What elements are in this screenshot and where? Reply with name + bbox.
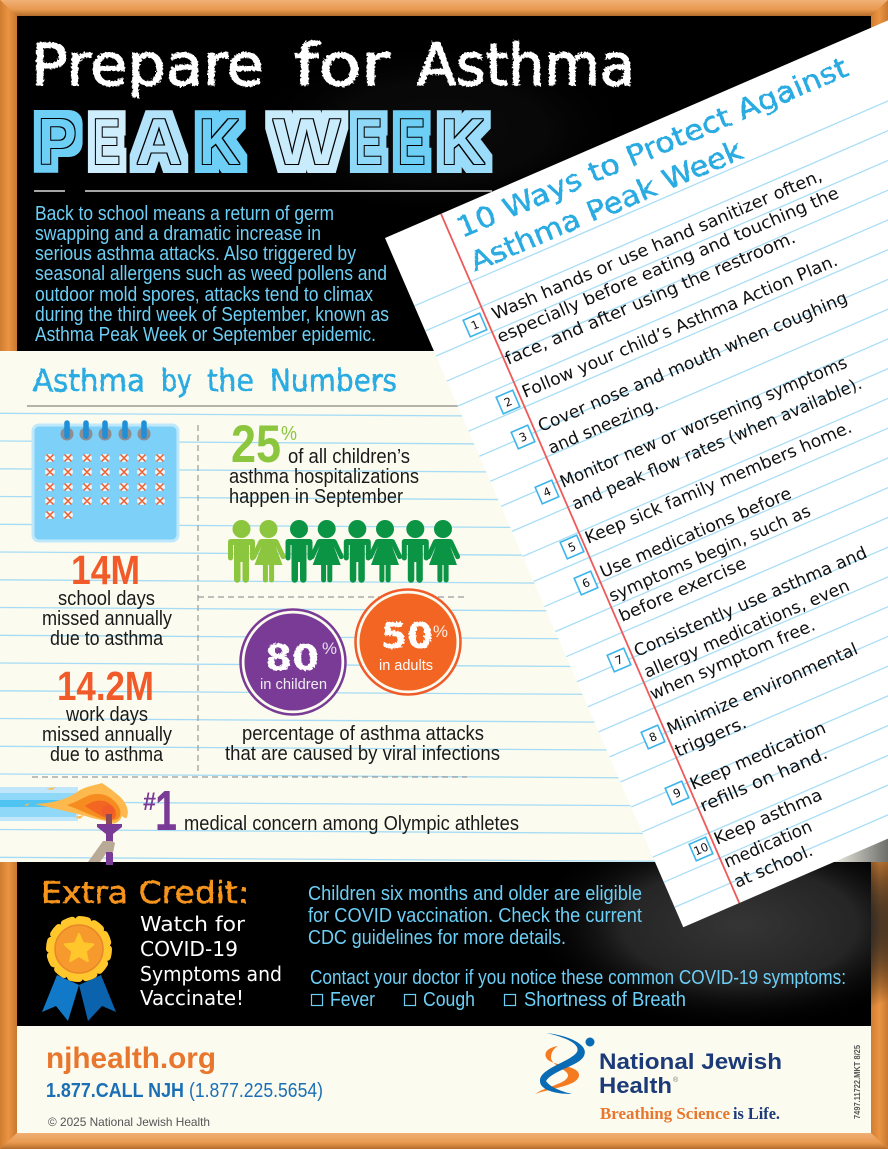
number boxes: 10 (692, 840, 710, 858)
badge: 80% in children (240, 610, 346, 714)
list of ten tips: Follow your child’s Asthma Action Plan. (519, 251, 841, 403)
logo: wordmark: Health (599, 1073, 672, 1098)
badge: 50% in adults: % (433, 622, 448, 641)
list of ten tips: at school. (731, 841, 816, 893)
title: Prepare for Asthma: Asthma (417, 31, 635, 99)
stat: 14.2M work days: work days (65, 704, 148, 726)
stat: 14.2M work days (42, 663, 172, 766)
text: watch for covid symptoms: Watch for (140, 912, 246, 936)
heading underline (27, 405, 458, 407)
heading: Extra Credit: Extra Credit: (41, 876, 249, 911)
text: watch for covid symptoms (140, 912, 282, 1010)
logo: wordmark: Breathing Science (600, 1104, 730, 1123)
stat: 25% hospitalizations: % (281, 423, 297, 445)
panel heading: by (161, 364, 192, 399)
stat: 25% hospitalizations: happen in September (229, 486, 403, 508)
intro paragraph: swapping and a dramatic increase in (35, 223, 321, 245)
number boxes: 1 (469, 317, 481, 333)
title: PEAK WEEK: P (38, 105, 77, 178)
logo: wordmark: is Life. (733, 1104, 780, 1123)
list of ten tips: before exercise (616, 554, 750, 627)
stat: #1 medical concern: # (143, 788, 156, 816)
logo: wordmark (599, 1049, 782, 1123)
title: PEAK WEEK: W (273, 105, 341, 178)
intro paragraph: Asthma Peak Week or September epidemic. (35, 324, 376, 346)
stat: 14.2M work days: due to asthma (50, 744, 164, 766)
paper heading (452, 51, 853, 278)
footer panel (17, 1026, 871, 1133)
number boxes: 5 (566, 539, 578, 555)
text: watch for covid symptoms: Vaccinate! (140, 986, 244, 1010)
stat: 14M school days: due to asthma (50, 628, 164, 650)
intro paragraph: seasonal allergens such as weed pollens and (35, 263, 387, 285)
phone number: 1.877.CALL NJH (46, 1080, 184, 1102)
text: watch for covid symptoms: Symptoms and (140, 962, 282, 986)
list of ten tips: Minimize environmental (664, 639, 861, 740)
text: covid symptoms checklist: Cough (423, 989, 475, 1011)
stat: 25% hospitalizations: asthma hospitalizations (229, 466, 419, 488)
print code: 7497.11722.MKT 8/25 (853, 1044, 862, 1119)
logo: wordmark: ® (673, 1076, 679, 1084)
list of ten tips: medication (721, 817, 815, 873)
stat: 25% hospitalizations: of all children’s (288, 446, 410, 468)
text: watch for covid symptoms: COVID-19 (140, 937, 238, 961)
list of ten tips: allergy medications, even (641, 576, 853, 683)
number boxes: 8 (647, 729, 659, 745)
icon: calendar (33, 423, 178, 541)
stat: #1 medical concern: 1 (155, 779, 177, 843)
list of ten tips (489, 166, 870, 893)
panel heading: Numbers (270, 364, 397, 399)
badge: 50% in adults (356, 590, 460, 694)
text: vaccination info (308, 883, 642, 949)
text: covid symptoms checklist: Shortness of Breath (524, 989, 686, 1011)
stat: #1 medical concern: medical concern among Olympic athletes (184, 813, 519, 835)
intro paragraph: during the third week of September, known as (35, 304, 389, 326)
panel heading: Asthma (33, 364, 145, 399)
list of ten tips: Monitor new or worsening symptoms (557, 353, 850, 493)
number boxes: 2 (502, 394, 514, 410)
stat: 14M school days: missed annually (42, 608, 172, 630)
title: PEAK WEEK: E (93, 105, 120, 178)
list of ten tips: Wash hands or use hand sanitizer often, (489, 166, 825, 325)
text: covid symptoms checklist: Fever (330, 989, 375, 1011)
number boxes: 4 (541, 484, 553, 500)
text: vaccination info: Children six months and older are eligible (308, 883, 642, 905)
number boxes (463, 313, 713, 861)
number boxes: 7 (613, 652, 625, 668)
panel heading: the (207, 364, 254, 399)
stat: 14.2M work days: 14.2M (57, 663, 154, 709)
title: Prepare for Asthma: for (294, 31, 390, 99)
title: PEAK WEEK: K (441, 105, 485, 178)
logo: wordmark: National Jewish (599, 1049, 782, 1074)
stat: #1 medical concern (143, 779, 519, 843)
caption: viral infections: that are caused by viral infections (225, 743, 500, 765)
list of ten tips: Consistently use asthma and (631, 543, 870, 662)
list of ten tips: triggers. (672, 713, 750, 762)
stat: 14M school days: school days (58, 588, 155, 610)
copyright: © 2025 National Jewish Health (48, 1115, 210, 1129)
phone number: (1.877.225.5654) (189, 1080, 323, 1102)
badge: 80% in children: 80 (265, 638, 319, 679)
badge: 80% in children: % (322, 639, 337, 658)
number boxes: 3 (517, 429, 529, 445)
badge: 50% in adults: 50 (381, 616, 433, 657)
stat: 25% hospitalizations: 25 (231, 415, 281, 474)
stat: 14M school days (42, 547, 172, 650)
stat: 14M school days: 14M (71, 547, 140, 593)
text: vaccination info: for COVID vaccination. Check the current (308, 905, 642, 927)
list of ten tips: Keep sick family members home. (582, 418, 855, 549)
logo: helix (535, 1033, 594, 1094)
website url: njhealth.org (46, 1042, 216, 1075)
list of ten tips: especially before eating and touching the (494, 183, 842, 348)
icon: row of children (228, 520, 460, 583)
badge: 50% in adults: in adults (379, 657, 433, 674)
title: PEAK WEEK: K (199, 105, 240, 178)
intro paragraph: serious asthma attacks. Also triggered by (35, 243, 356, 265)
title: PEAK WEEK: A (136, 105, 182, 178)
paper heading: 10 Ways to Protect Against (452, 51, 853, 244)
badge: 80% in children: in children (260, 676, 327, 693)
number boxes: 9 (671, 785, 683, 801)
panel: notebook paper (385, 0, 888, 927)
text: covid symptoms checklist (310, 967, 846, 1011)
list of ten tips: Keep asthma (711, 785, 825, 850)
intro paragraph: outdoor mold spores, attacks tend to climax (35, 284, 373, 306)
list of ten tips: symptoms begin, such as (606, 501, 814, 607)
caption: viral infections (225, 723, 500, 765)
icon: award ribbon (42, 920, 116, 1021)
phone number (46, 1080, 323, 1102)
stat: 14.2M work days: missed annually (42, 724, 172, 746)
chalk divider line (34, 190, 492, 192)
text: vaccination info: CDC guidelines for more details. (308, 927, 566, 949)
intro paragraph: Back to school means a return of germ (35, 203, 334, 225)
list of ten tips: face, and after using the restroom. (502, 228, 799, 370)
icon: olympic torch (0, 783, 128, 865)
list of ten tips: Cover nose and mouth when coughing (535, 288, 851, 437)
title: PEAK WEEK: E (355, 105, 382, 178)
number boxes: 6 (580, 575, 592, 591)
list of ten tips: when symptom free. (647, 616, 818, 705)
list of ten tips: and sneezing. (545, 394, 662, 459)
list of ten tips: Use medications before (597, 484, 795, 583)
title: PEAK WEEK: E (398, 105, 425, 178)
list of ten tips: Keep medication (687, 718, 829, 795)
list of ten tips: refills on hand. (697, 744, 831, 817)
title: Prepare for Asthma: Prepare (31, 31, 264, 99)
paper heading: Asthma Peak Week (465, 133, 748, 278)
caption: viral infections: percentage of asthma attacks (242, 723, 484, 745)
list of ten tips: and peak flow rates (when available). (569, 374, 865, 515)
intro paragraph (35, 203, 389, 346)
stat: 25% hospitalizations (229, 415, 419, 508)
panel: asthma by the numbers (0, 351, 660, 865)
